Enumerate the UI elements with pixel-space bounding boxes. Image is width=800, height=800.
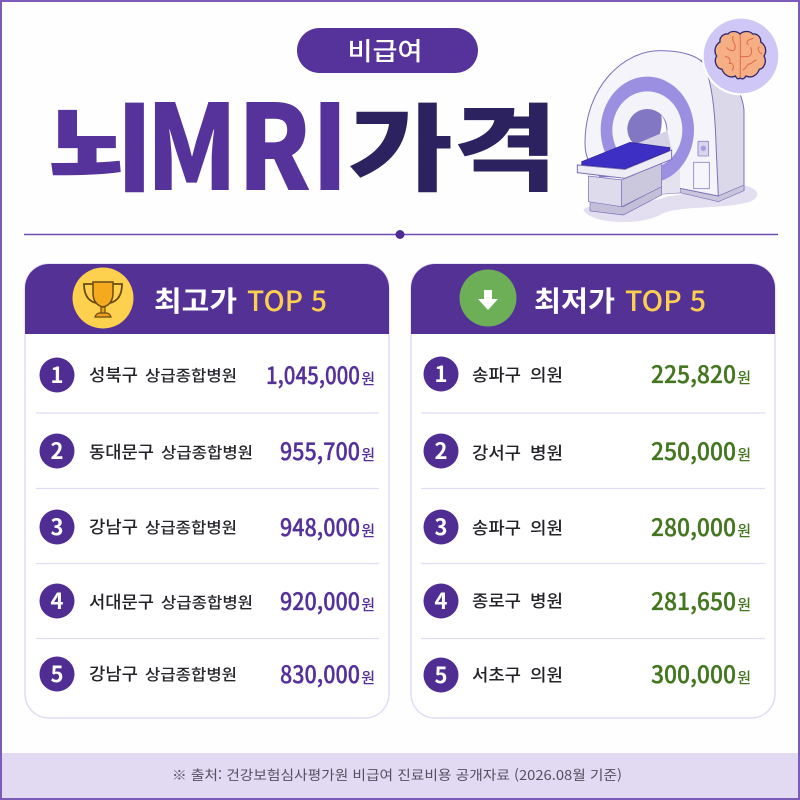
row 2: 2 (51, 434, 63, 466)
row 2: 955,700 (280, 432, 360, 467)
row 5: 830,000 (280, 655, 360, 690)
header text: lowest: 최저가 (534, 280, 615, 320)
row 5: 상급종합병원 (145, 663, 237, 685)
row 3: 948,000 (280, 508, 360, 543)
row 1: 1 (51, 358, 63, 390)
row 4: 상급종합병원 (161, 591, 253, 613)
icon: down arrow (460, 270, 516, 326)
row 3: 의원 (530, 514, 563, 539)
table tray (577, 150, 672, 178)
row 3 (424, 508, 751, 544)
row 4: 병원 (530, 587, 563, 612)
panel: highest prices (25, 264, 389, 718)
header text: highest: 최고가 (154, 280, 237, 320)
row 4: 4 (51, 584, 64, 616)
table mattress (582, 142, 670, 169)
row 2 (40, 432, 375, 468)
source note: ※ 출처: 건강보험심사평가원 비급여 진료비용 공개자료 (2026.08월 기준) (172, 764, 622, 784)
scanner side (700, 60, 744, 201)
control panel (698, 141, 709, 156)
row 2: 동대문구 (89, 438, 154, 463)
row 4: 원 (361, 594, 375, 615)
row 5: 300,000 (651, 655, 736, 690)
panel header: highest (25, 264, 389, 334)
row 4: 원 (737, 594, 751, 615)
row 4: 4 (435, 584, 448, 616)
panel header: lowest: TOP 5 (625, 280, 706, 320)
row 4: 종로구 (472, 587, 521, 612)
row 5: 5 (51, 657, 63, 689)
row 2: 2 (435, 434, 447, 466)
row 5: 서초구 (472, 661, 521, 686)
row 2: 병원 (530, 439, 563, 464)
icon: brain (715, 31, 766, 79)
row 5: 원 (361, 667, 375, 688)
title: MRI (146, 53, 348, 224)
gantry ring (601, 77, 694, 183)
row 1: 원 (361, 368, 375, 389)
scanner front (585, 51, 718, 196)
row 2: 상급종합병원 (161, 441, 253, 463)
footer bar (1, 753, 799, 798)
row 4: 서대문구 (89, 588, 154, 613)
brain badge (702, 17, 780, 95)
table base (588, 176, 622, 207)
badge: 비급여: 비급여 (348, 32, 422, 68)
row 1: 성북구 (89, 361, 138, 386)
row 2: 원 (737, 444, 751, 465)
title: 가격 (348, 74, 558, 211)
icon: MRI scanner with brain (577, 17, 780, 222)
row 5 (424, 655, 751, 692)
divider with dot (24, 230, 778, 239)
panel header: highest: TOP 5 (247, 280, 327, 320)
row 3: 280,000 (651, 508, 736, 543)
row 1: 1,045,000 (266, 356, 360, 391)
row 1: 의원 (530, 361, 563, 386)
row 2: 원 (361, 444, 375, 465)
row 4 (40, 582, 375, 618)
badge: 비급여 (297, 28, 478, 73)
row 4: 920,000 (280, 582, 360, 617)
row 1 (40, 356, 375, 392)
icon: trophy (72, 268, 134, 328)
row 3: 원 (361, 520, 375, 541)
row 5: 5 (435, 658, 447, 690)
row 2 (424, 432, 751, 468)
row 1: 225,820 (651, 355, 736, 390)
door panel (694, 162, 709, 189)
title (47, 53, 558, 224)
row 3: 3 (435, 510, 447, 542)
row 3: 원 (737, 520, 751, 541)
row 5: 강남구 (89, 660, 138, 685)
row 3: 상급종합병원 (145, 516, 237, 538)
row 1 (424, 355, 751, 392)
row 3: 3 (51, 510, 63, 542)
row 5: 의원 (530, 661, 563, 686)
table foot (590, 186, 662, 215)
row 3 (40, 508, 375, 544)
row 4: 281,650 (651, 582, 736, 617)
row 2: 250,000 (651, 432, 736, 467)
floor shadow (583, 185, 757, 222)
row 1: 원 (737, 367, 751, 388)
scanner plinth (662, 185, 744, 202)
row 5 (40, 655, 375, 692)
panel: lowest prices (411, 264, 775, 718)
title: 뇌 (47, 74, 154, 211)
row 2: 강서구 (472, 439, 521, 464)
row 1: 1 (435, 357, 447, 389)
bore (627, 109, 667, 149)
row 3: 강남구 (89, 513, 138, 538)
row 1: 송파구 (472, 361, 521, 386)
panel header: lowest (411, 264, 775, 334)
row 3: 송파구 (472, 514, 521, 539)
row 4 (424, 582, 751, 618)
row 5: 원 (737, 667, 751, 688)
row 1: 상급종합병원 (145, 364, 237, 386)
